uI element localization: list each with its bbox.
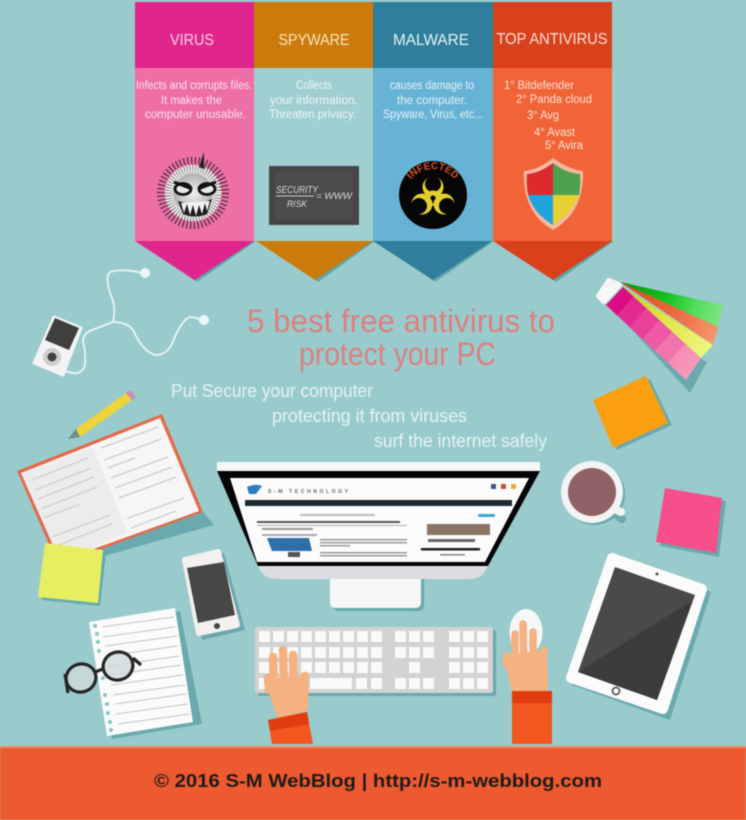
spyware description: Collects (296, 80, 332, 92)
icon: infected biohazard: INFECTED (406, 161, 459, 180)
icon: virus monster (162, 152, 224, 224)
malware description (383, 80, 483, 121)
antivirus ranking: 4° Avast (534, 127, 576, 139)
icon: chalkboard security risk: = WWW (316, 191, 354, 201)
spyware header: SPYWARE (278, 32, 350, 49)
subtitle: surf the internet safely (374, 431, 547, 451)
keyboard (255, 627, 496, 696)
malware description: Spyware, Virus, etc... (383, 109, 483, 121)
antivirus ranking: 1° Bitdefender (504, 80, 574, 92)
malware header (373, 2, 493, 68)
panel: top antivirus (493, 2, 614, 282)
top antivirus arrow (493, 241, 614, 282)
panel: spyware (254, 2, 375, 282)
icon: infected biohazard (398, 160, 468, 230)
monitor stand (330, 575, 424, 611)
subtitle (171, 381, 547, 451)
antivirus ranking: 2° Panda cloud (516, 94, 592, 106)
virus description: computer unusable. (145, 109, 246, 121)
icon: smartphone (185, 552, 245, 640)
icon: coffee cup (561, 461, 625, 525)
title (247, 303, 555, 372)
virus description (136, 80, 252, 121)
icon: lined notepad (89, 608, 202, 739)
panel: virus (135, 2, 256, 282)
title: protect your PC (299, 336, 496, 372)
spyware header (254, 2, 373, 68)
copyright text: © 2016 S-M WebBlog | http://s-m-webblog.com (154, 771, 602, 791)
icon: chalkboard security risk: SECURITY (276, 185, 319, 196)
antivirus ranking (504, 80, 592, 152)
antivirus ranking: 3° Avg (527, 110, 559, 122)
monitor bezel (217, 471, 540, 566)
sticky note: pink (656, 488, 726, 557)
malware header: MALWARE (393, 32, 469, 49)
sticky note: yellow (38, 543, 106, 606)
top antivirus header: TOP ANTIVIRUS (496, 31, 608, 48)
spyware description: Threaten privacy. (269, 109, 356, 121)
footer band (0, 746, 746, 820)
icon: music player with earphones (34, 268, 209, 375)
subtitle: Put Secure your computer (171, 381, 373, 401)
title: 5 best free antivirus to (247, 303, 555, 339)
icon: shield (524, 158, 583, 230)
icon: chalkboard security risk (269, 166, 359, 225)
virus header: VIRUS (170, 32, 214, 49)
spyware arrow (256, 241, 375, 282)
website screenshot: S-M TECHNOLOGY (268, 489, 349, 495)
virus description: Infects and corrupts files. (136, 80, 252, 92)
left hand on keyboard (265, 650, 313, 744)
monitor (217, 462, 540, 611)
malware description: causes damage to (390, 80, 474, 92)
panel: malware (372, 1, 494, 282)
website screenshot (230, 478, 529, 562)
icon: pencil (68, 390, 136, 439)
monitor top edge (217, 462, 540, 471)
icon: open book (17, 414, 214, 565)
antivirus ranking: 5° Avira (545, 140, 584, 152)
virus arrow (135, 241, 256, 282)
icon: chalkboard security risk: RISK (287, 199, 308, 209)
top antivirus header (493, 2, 612, 68)
icon: glasses (62, 648, 141, 696)
mouse and right hand (503, 609, 552, 744)
spyware description (269, 80, 358, 121)
malware arrow (373, 241, 494, 282)
icon: color swatch fan (599, 281, 723, 393)
virus header (135, 2, 254, 68)
spyware description: your information. (270, 95, 358, 107)
sticky note: orange (593, 376, 672, 450)
subtitle: protecting it from viruses (272, 406, 467, 426)
monitor base (258, 566, 488, 579)
malware description: the computer. (397, 95, 467, 107)
virus description: It makes the (161, 95, 222, 107)
icon: tablet (571, 558, 711, 720)
